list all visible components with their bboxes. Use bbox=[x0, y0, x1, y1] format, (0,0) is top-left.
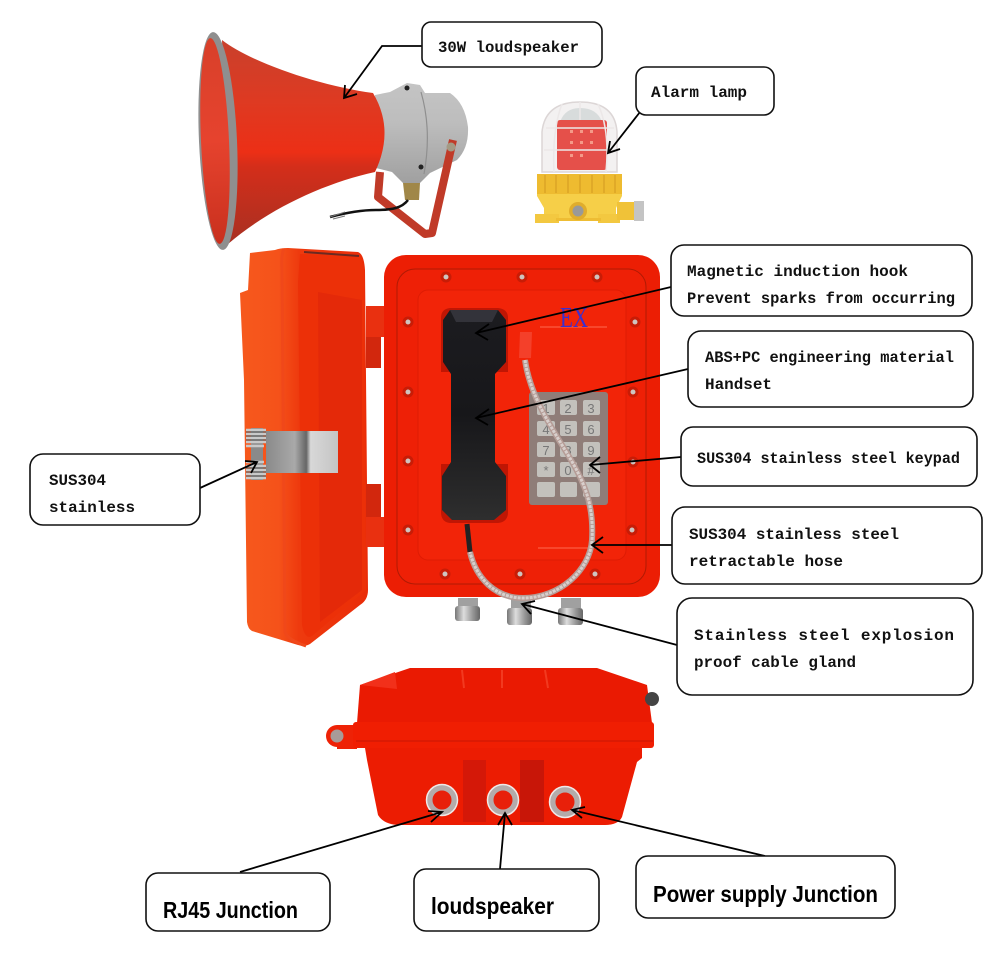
callout: keypad bbox=[681, 427, 977, 486]
arrow: alarm lamp bbox=[608, 112, 640, 153]
callout: SUS304 stainless: stainless bbox=[49, 499, 135, 517]
callout: hose: retractable hose bbox=[689, 553, 843, 571]
callout: loudspeaker port bbox=[414, 869, 599, 931]
callout: hose bbox=[672, 507, 982, 584]
icon: stainless steel keypad: 7 bbox=[542, 443, 550, 458]
icon: stainless steel keypad: # bbox=[587, 463, 595, 478]
callout: handset material: Handset bbox=[705, 376, 772, 394]
icon: stainless steel door latch bbox=[246, 428, 338, 480]
arrow: hook bbox=[476, 287, 671, 340]
icon: stainless steel keypad: 4 bbox=[542, 422, 550, 437]
callout: alarm lamp bbox=[636, 67, 774, 115]
icon: stainless steel keypad bbox=[529, 392, 608, 505]
icon: stainless steel keypad: 0 bbox=[564, 463, 572, 478]
icon: red horn loudspeaker bbox=[194, 31, 468, 251]
icon: stainless steel keypad: 9 bbox=[587, 443, 595, 458]
callout: loudspeaker port: loudspeaker bbox=[431, 893, 554, 919]
arrow: cable gland bbox=[522, 601, 677, 645]
arrow: keypad bbox=[590, 457, 681, 473]
callout: RJ45 Junction bbox=[146, 873, 330, 931]
icon: cable glands bbox=[455, 598, 583, 625]
callout: power supply junction bbox=[636, 856, 895, 918]
arrow: RJ45 bbox=[240, 811, 442, 872]
icon: alarm lamp bbox=[535, 102, 644, 223]
icon: stainless steel keypad: * bbox=[543, 463, 549, 478]
callout: hose: SUS304 stainless steel bbox=[689, 526, 899, 544]
icon: stainless steel keypad: 3 bbox=[587, 401, 595, 416]
arrow: handset bbox=[476, 369, 688, 425]
callout: handset material bbox=[688, 331, 973, 407]
icon: stainless steel keypad: 8 bbox=[564, 443, 572, 458]
callout: handset material: ABS+PC engineering material bbox=[705, 349, 954, 367]
icon: stainless steel keypad: 1 bbox=[542, 401, 550, 416]
callout: power supply junction: Power supply Junction bbox=[653, 881, 878, 907]
arrow: loudspeaker port bbox=[498, 813, 512, 869]
arrow: hose bbox=[592, 537, 672, 553]
panel: telephone body bbox=[384, 255, 660, 597]
icon: open telephone door bbox=[240, 248, 384, 646]
icon: stainless steel keypad: 2 bbox=[564, 401, 572, 416]
icon: stainless steel keypad: 5 bbox=[564, 422, 572, 437]
callout: cable gland bbox=[677, 598, 973, 695]
icon: telephone side view bbox=[326, 668, 659, 825]
callout: magnetic induction hook: Prevent sparks from occurring bbox=[687, 290, 955, 308]
callout: 30W loudspeaker: 30W loudspeaker bbox=[438, 39, 579, 57]
callout: cable gland: proof cable gland bbox=[694, 654, 856, 672]
label: EX mark: EX bbox=[560, 302, 588, 334]
icon: hook cradle bbox=[519, 332, 532, 358]
callout: keypad: SUS304 stainless steel keypad bbox=[697, 450, 960, 468]
callout: SUS304 stainless: SUS304 bbox=[49, 472, 106, 490]
icon: stainless steel keypad: 6 bbox=[587, 422, 595, 437]
callout: 30W loudspeaker bbox=[422, 22, 602, 67]
callout: alarm lamp: Alarm lamp bbox=[651, 84, 747, 102]
callout: RJ45 Junction: RJ45 Junction bbox=[163, 897, 298, 923]
icon: black handset bbox=[441, 308, 508, 523]
callout: magnetic induction hook: Magnetic induction hook bbox=[687, 263, 908, 281]
icon: retractable steel hose bbox=[467, 360, 592, 598]
arrow: latch bbox=[200, 461, 257, 488]
callout: cable gland: Stainless steel explosion bbox=[694, 627, 954, 645]
arrow: power supply bbox=[572, 807, 765, 856]
callout: SUS304 stainless bbox=[30, 454, 200, 525]
callout: magnetic induction hook bbox=[671, 245, 972, 316]
arrow: 30W loudspeaker bbox=[344, 46, 422, 98]
